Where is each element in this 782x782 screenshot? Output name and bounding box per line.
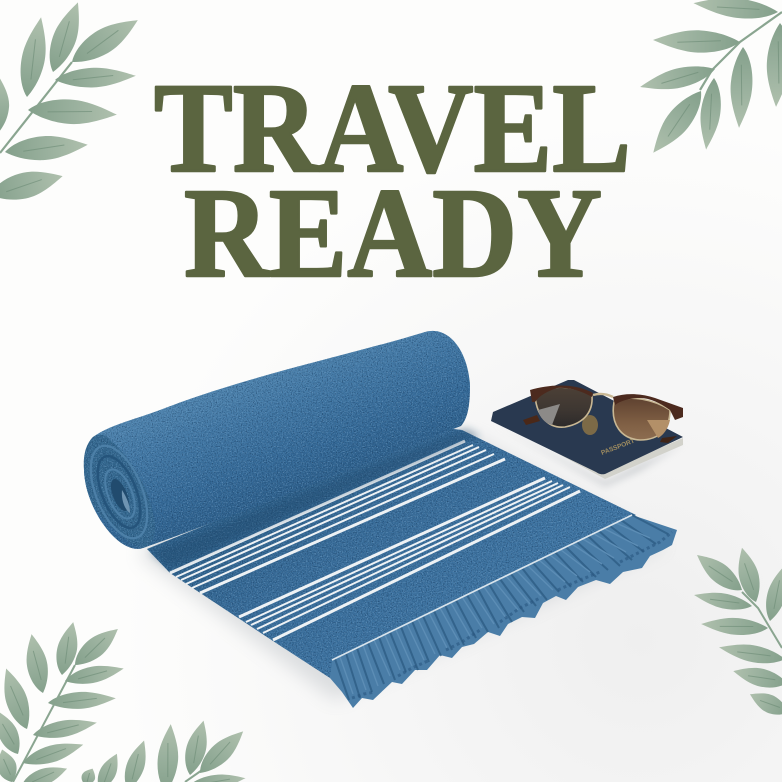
left brow (530, 385, 593, 402)
left lens reflection (538, 404, 560, 425)
towel shadow (140, 435, 665, 700)
fringe edge line (332, 515, 632, 660)
right lens highlight (647, 420, 670, 438)
right lens (613, 398, 670, 440)
roll body (84, 331, 470, 549)
title line 2: READY (184, 162, 602, 304)
white stripes: second group (239, 478, 580, 640)
foliage: top left branch (0, 0, 144, 207)
foliage: top right branch (638, 0, 782, 160)
light fringe strands (340, 523, 650, 694)
foliage: bottom left branch (0, 620, 125, 782)
title (154, 57, 631, 304)
foliage: bottom right branch (691, 545, 782, 720)
fringe (330, 515, 677, 708)
flat towel body (147, 428, 636, 678)
foliage: bottom centre sprout (79, 718, 250, 782)
right temple arm (660, 436, 677, 443)
passport pages (490, 417, 683, 479)
title line 1: TRAVEL (154, 57, 631, 199)
right brow (613, 394, 683, 420)
left temple arm (523, 415, 540, 425)
passport shadow (492, 422, 686, 486)
white stripes: first group (170, 441, 505, 593)
passport emblem (582, 415, 598, 435)
left lens (535, 387, 592, 427)
roll shadow on towel (150, 428, 480, 568)
passport and sunglasses (490, 380, 686, 486)
dark fringe strands (335, 515, 668, 700)
rolled striped towel (79, 331, 677, 708)
bridge (593, 394, 613, 397)
dark fringe tips (352, 532, 672, 698)
passport cover (491, 380, 683, 474)
sunglasses (523, 385, 683, 443)
passport lettering: PASSPORT (600, 438, 636, 457)
roll end spiral (79, 435, 159, 548)
